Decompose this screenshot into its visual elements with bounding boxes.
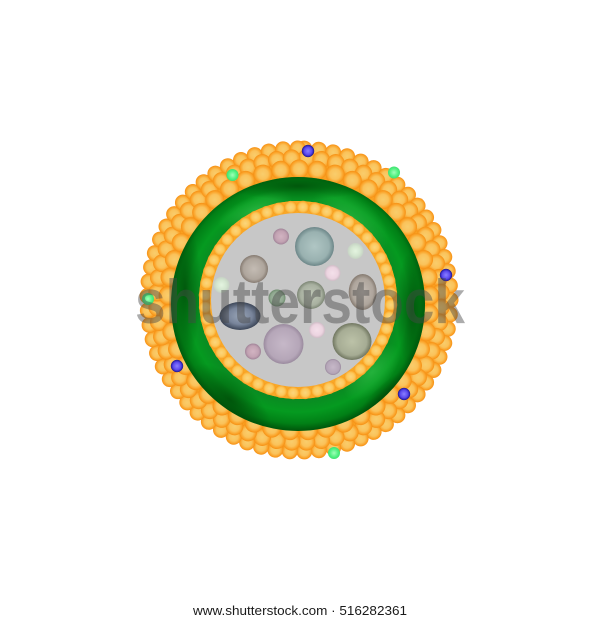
organelles: [214, 227, 377, 375]
watermark: shutterstock: [135, 268, 465, 337]
green ring: [171, 177, 425, 431]
inner orange membrane of spheres: [175, 177, 421, 423]
blue membrane particles: [171, 145, 452, 400]
grey cytoplasm: [211, 213, 385, 387]
infographic: cell diagram: [137, 140, 465, 615]
green membrane particles: [142, 166, 400, 459]
outer orange membrane of spheres: [99, 115, 504, 505]
footer image id: www.shutterstock.com · 516282361: [192, 603, 407, 618]
